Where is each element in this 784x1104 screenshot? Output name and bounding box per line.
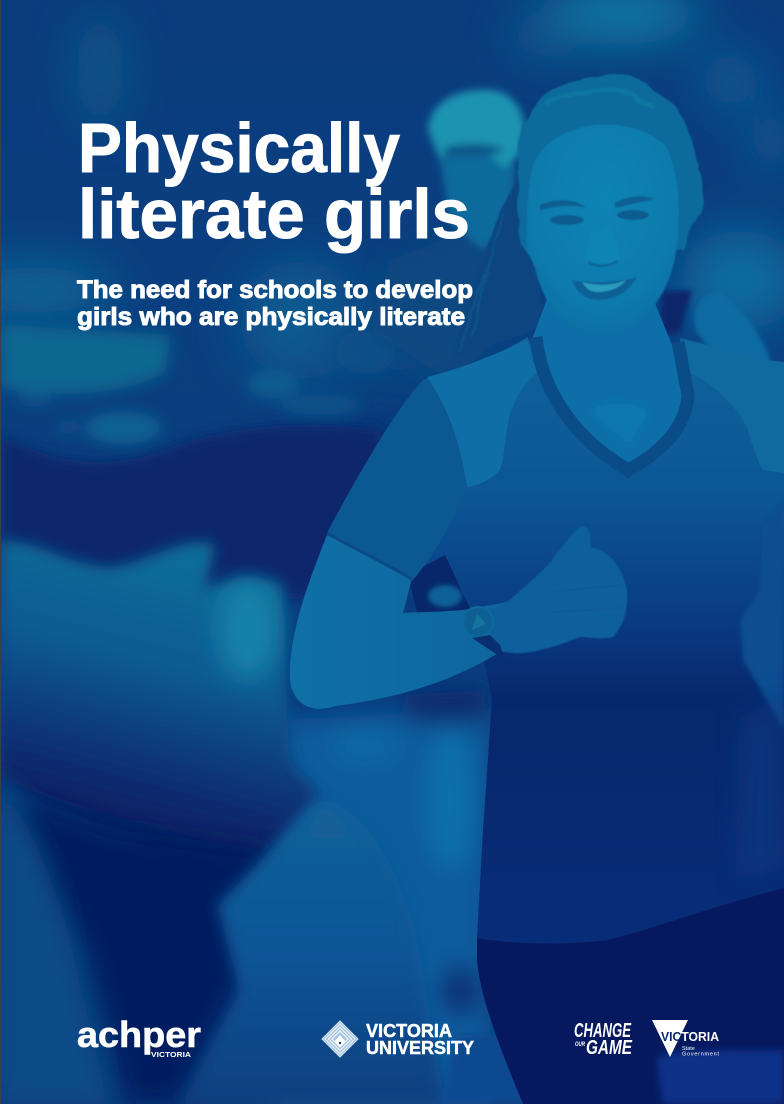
logo: Victoria University: UNIVERSITY bbox=[366, 1038, 474, 1058]
icon: diamond bbox=[322, 1021, 358, 1057]
title: Physically bbox=[78, 109, 400, 187]
face bbox=[527, 125, 679, 337]
title bbox=[78, 109, 470, 253]
logo: Victoria State Government: VICTORIA bbox=[661, 1030, 719, 1044]
logo: Change Our Game: OUR bbox=[575, 1042, 585, 1048]
logo: Change Our Game: GAME bbox=[586, 1037, 633, 1059]
title: literate girls bbox=[78, 175, 470, 253]
subtitle bbox=[77, 276, 473, 331]
shorts bbox=[477, 888, 784, 1104]
left arm bbox=[290, 535, 530, 709]
shirt side light bbox=[735, 500, 784, 880]
logo: Change Our Game bbox=[574, 1020, 633, 1059]
logo: Victoria University: VICTORIA bbox=[366, 1021, 452, 1041]
runner: main woman bbox=[290, 74, 784, 1104]
background runner with cap bbox=[370, 90, 525, 380]
watch bbox=[463, 607, 505, 660]
blue patch bottom right bbox=[657, 1050, 784, 1104]
neck highlight bbox=[590, 403, 648, 445]
logo: Change Our Game: CHANGE bbox=[574, 1020, 631, 1042]
logo: Victoria State Government bbox=[652, 1020, 719, 1058]
neck bbox=[530, 296, 692, 470]
logo: Victoria State Government: State bbox=[682, 1046, 695, 1052]
shirt bbox=[327, 337, 784, 944]
subtitle: girls who are physically literate bbox=[77, 303, 465, 331]
logo: Victoria State Government: Government bbox=[682, 1052, 719, 1058]
hair bbox=[454, 74, 704, 355]
mid background right of runner bbox=[280, 690, 490, 1104]
dark band left bbox=[0, 425, 380, 600]
logo: achper Victoria: VICTORIA bbox=[151, 1050, 192, 1059]
blurred foreground runner bbox=[0, 540, 320, 900]
light shoulder panels bbox=[427, 340, 537, 487]
logo: achper Victoria: achper bbox=[77, 1014, 201, 1055]
left page edge bbox=[0, 0, 1, 1104]
logo: Victoria University bbox=[322, 1021, 474, 1058]
gap between arm and torso bbox=[408, 555, 485, 640]
sleeve bbox=[327, 380, 463, 580]
top patch and blurred spots bbox=[0, 325, 396, 444]
forearm and hand bbox=[490, 526, 627, 653]
subtitle: The need for schools to develop bbox=[77, 276, 473, 304]
neckline collar bbox=[536, 337, 688, 470]
background person right shoulder bbox=[660, 290, 772, 365]
